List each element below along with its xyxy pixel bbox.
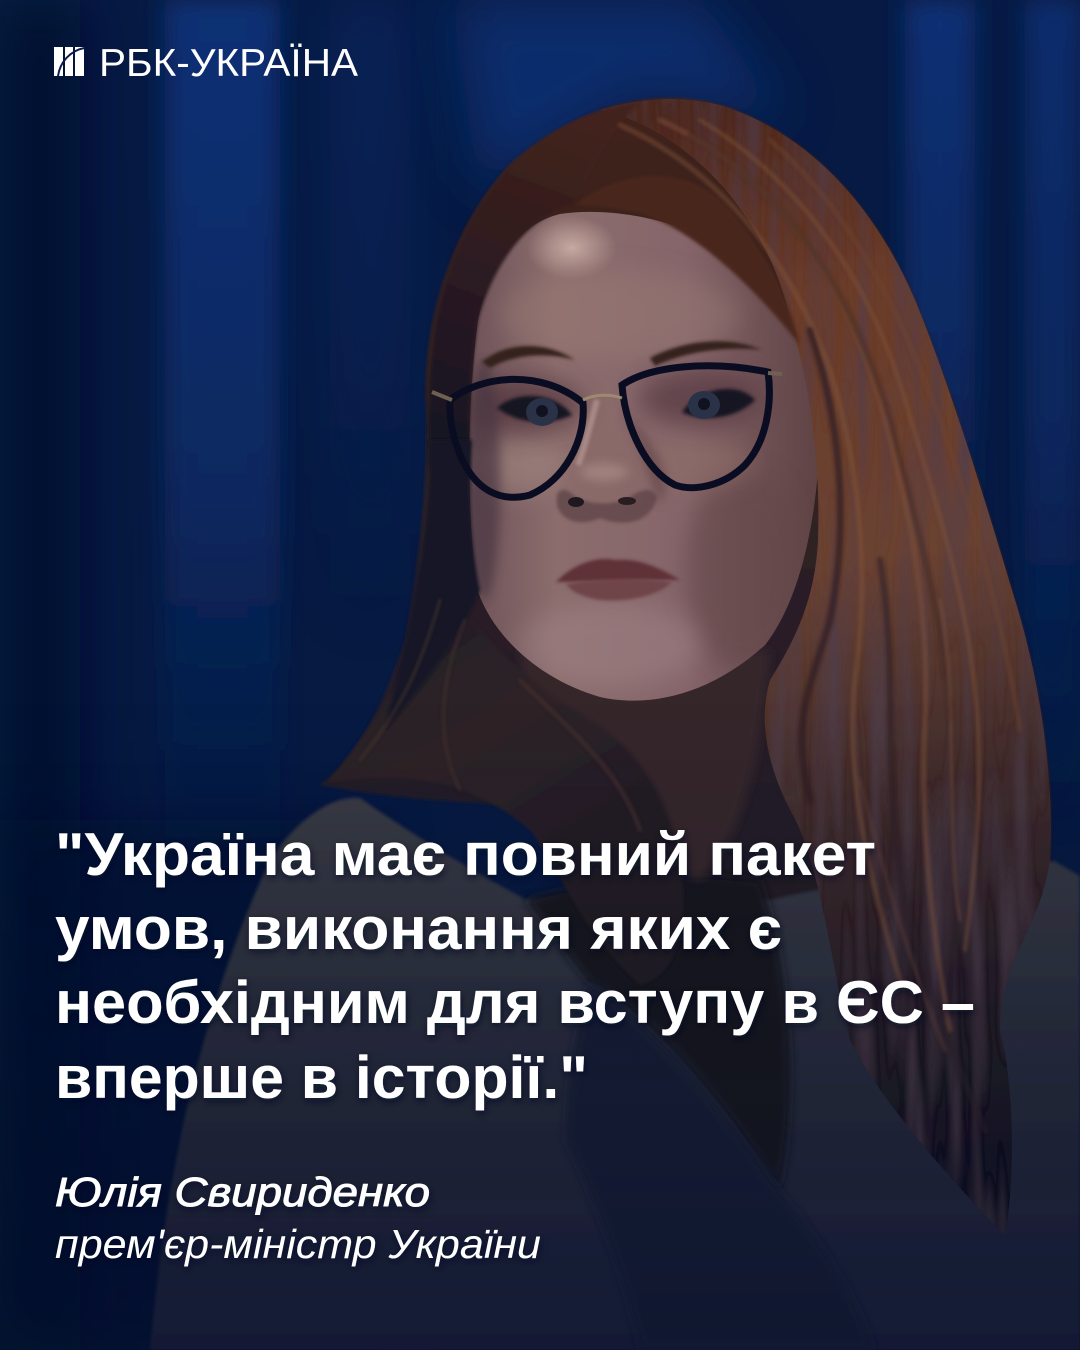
neck xyxy=(520,650,770,880)
quote: "Україна має повний пакет xyxy=(55,821,876,888)
logo wordmark: РБК-УКРАЇНА xyxy=(99,42,358,85)
face xyxy=(469,212,820,701)
hair: top sweep xyxy=(429,102,640,470)
lips xyxy=(556,559,680,601)
front hair: right strands xyxy=(600,99,1051,1235)
quote: умов, виконання яких є xyxy=(55,895,782,962)
darkening overlay on lower body xyxy=(0,700,1080,1350)
jacket lapel xyxy=(567,983,874,1350)
logo icon xyxy=(54,47,84,76)
logo: РБК-Україна xyxy=(54,42,358,85)
lower left hair over jacket xyxy=(328,590,684,985)
hair: dark left curtain xyxy=(385,440,480,730)
attribution: speaker name and role xyxy=(55,1169,541,1267)
quote: вперше в історії." xyxy=(55,1044,588,1111)
jacket xyxy=(150,798,1080,1350)
quote: необхідним для вступу в ЄС – xyxy=(55,969,975,1036)
eyes xyxy=(497,389,755,426)
hair strands xyxy=(360,120,1020,1130)
forehead highlight xyxy=(532,220,611,274)
nose xyxy=(557,400,657,523)
hair: parting sweep xyxy=(575,176,800,345)
portrait: woman with glasses xyxy=(150,96,1080,1350)
quote xyxy=(55,821,975,1111)
brows xyxy=(482,346,575,368)
hair back mass xyxy=(320,98,1051,1235)
speaker name: Юлія Свириденко xyxy=(55,1169,430,1215)
dark shirt xyxy=(525,876,790,1190)
speaker role: прем'єр-міністр України xyxy=(55,1221,541,1267)
glasses xyxy=(432,366,782,497)
